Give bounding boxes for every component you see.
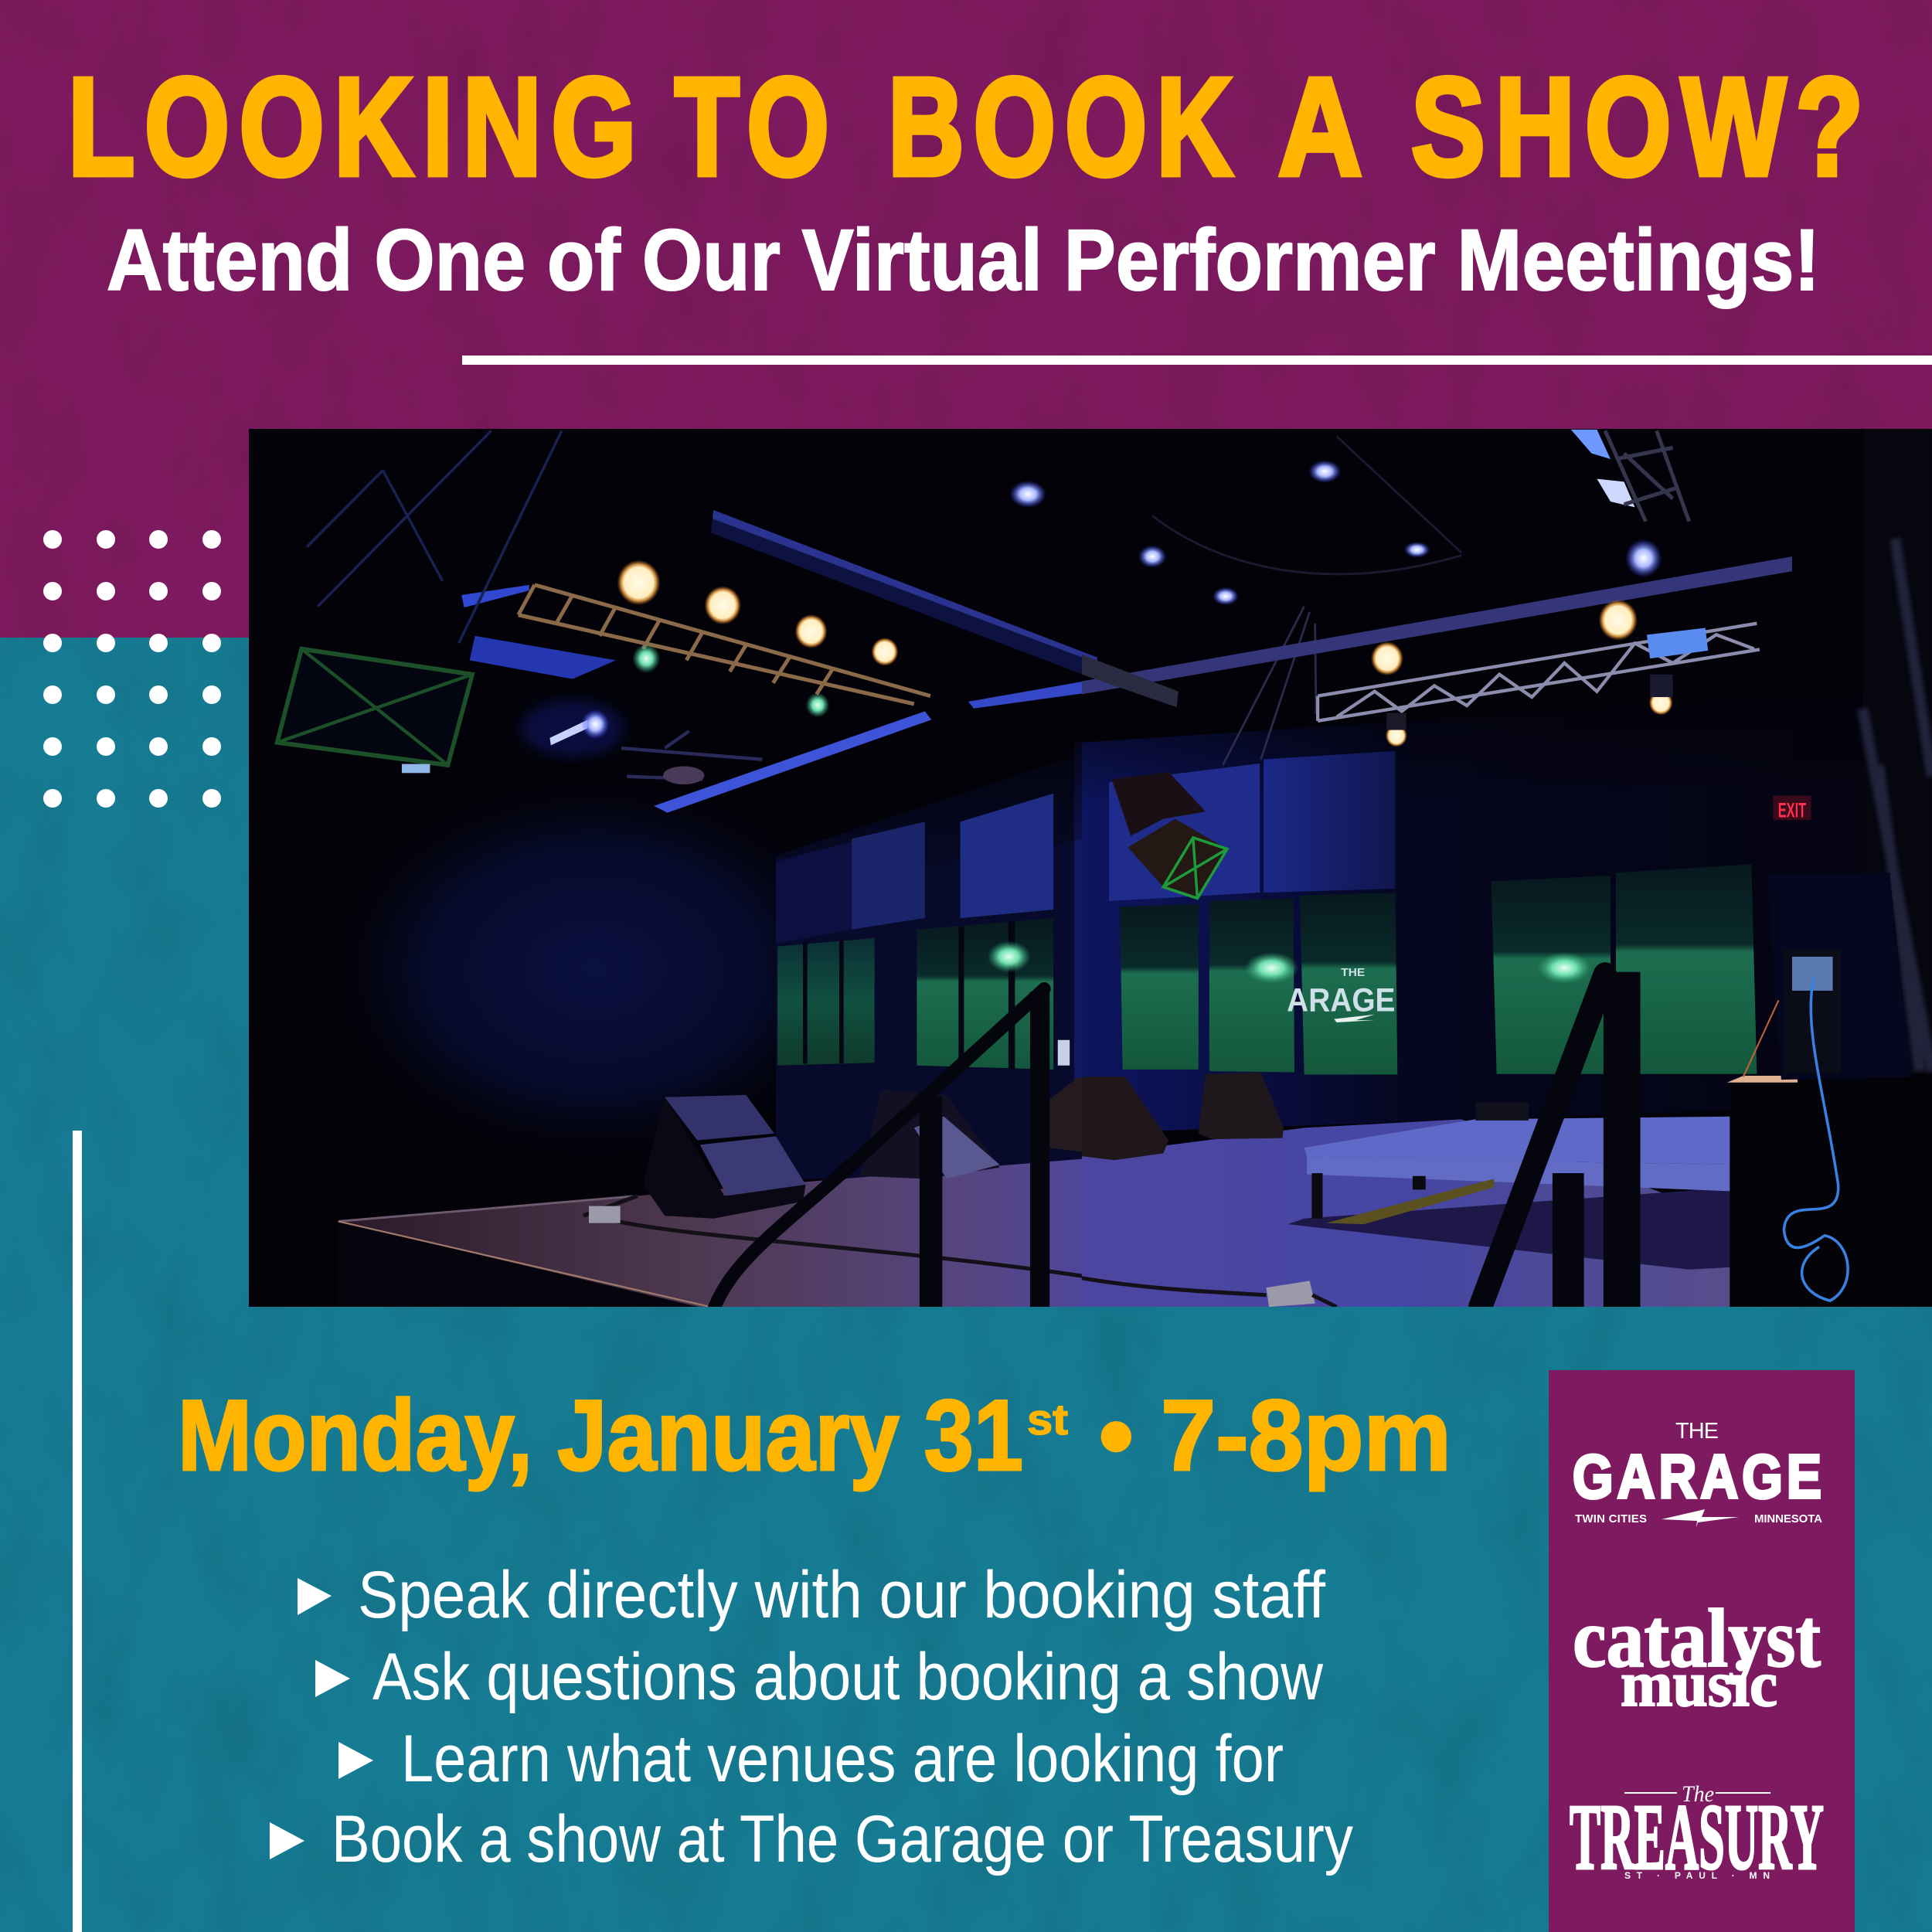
- vertical white rule: [73, 1131, 82, 1932]
- hanging speakers: [1112, 772, 1227, 898]
- event date heading: st: [1027, 1395, 1068, 1444]
- white rule under subtitle: [462, 355, 1932, 365]
- background: magenta upper band: [0, 0, 1932, 638]
- logo: Catalyst Music: music: [1621, 1648, 1777, 1720]
- logo: The Garage: MINNESOTA: [1754, 1512, 1822, 1526]
- title: [68, 49, 1873, 205]
- reflected window lettering: THE: [1341, 967, 1365, 979]
- dot grid: [43, 530, 221, 808]
- exit sign: EXIT: [1778, 800, 1806, 822]
- bullet 3: Learn what venues are looking for: [401, 1722, 1284, 1796]
- title: A: [1278, 49, 1372, 205]
- photo left half: [277, 430, 1114, 1309]
- title: BOOK: [888, 49, 1242, 205]
- logo: The Treasury: [1570, 1781, 1824, 1889]
- title: LOOKING: [68, 49, 646, 205]
- title: TO: [675, 49, 838, 205]
- logo: The Garage: GARAGE: [1573, 1442, 1825, 1511]
- logo: The Garage: [1573, 1419, 1825, 1528]
- bullet 1: Speak directly with our booking staff: [358, 1558, 1326, 1632]
- logo: The Garage: TWIN CITIES: [1575, 1512, 1647, 1526]
- bullet list: [270, 1558, 1353, 1876]
- event date heading: Monday, January 31: [178, 1379, 1023, 1492]
- logo: Catalyst Music: [1573, 1593, 1821, 1720]
- logo: The Garage: THE: [1675, 1419, 1719, 1444]
- photo right half: [1082, 425, 1932, 1309]
- panel: venue logos: [1549, 1370, 1855, 1932]
- event date heading: • 7-8pm: [1099, 1379, 1451, 1492]
- bullet 4: Book a show at The Garage or Treasury: [332, 1802, 1353, 1876]
- bullet 2: Ask questions about booking a show: [372, 1640, 1324, 1714]
- photo: venue stage: [249, 429, 1932, 1307]
- background: teal lower band: [0, 638, 1932, 1932]
- logo: Catalyst Music: catalyst: [1573, 1593, 1821, 1685]
- logo: The Treasury: ST · PAUL · MN: [1624, 1870, 1770, 1881]
- reflected window lettering: [1287, 967, 1395, 1019]
- logo: The Treasury: The: [1682, 1781, 1714, 1807]
- reflected window lettering: ARAGE: [1287, 981, 1395, 1019]
